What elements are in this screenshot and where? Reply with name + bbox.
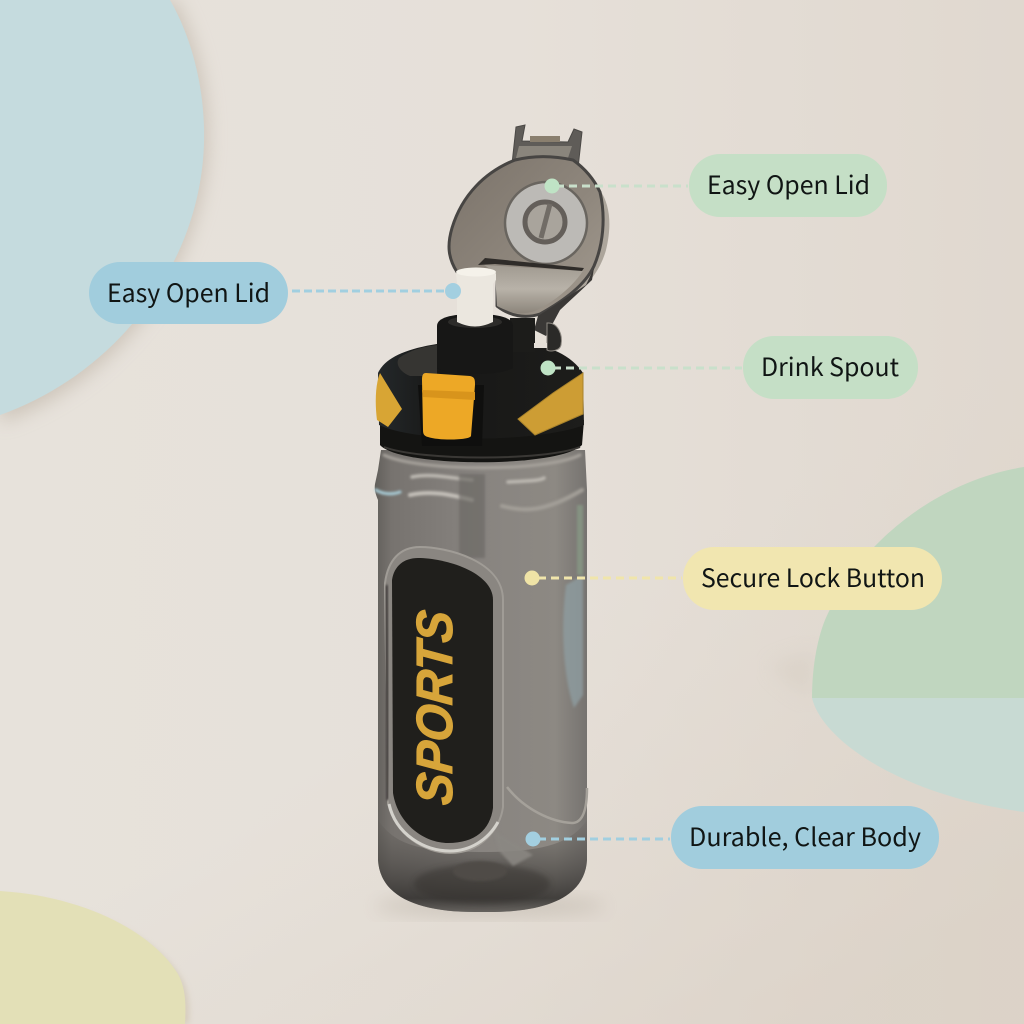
decorative circle: blue top left [0,0,208,423]
lock button ridge [422,390,475,400]
callout: easy open lid top [544,154,887,217]
dot [445,283,461,299]
pill [689,154,887,217]
lid opening bar [541,204,550,238]
button recess [418,385,484,446]
lock button [422,373,475,440]
spout back [510,318,535,352]
yellow left grip [376,373,402,427]
frame dark edge [386,585,388,800]
label frame [385,547,503,853]
label: Secure Lock Button [701,559,925,595]
side tint [563,575,583,708]
collar rim [384,447,580,458]
spout base [437,314,513,374]
dot [540,360,556,376]
pill [89,262,288,324]
callout: drink spout [540,336,918,399]
inner straw [459,474,485,558]
lid tab window [516,146,572,158]
leader [556,184,688,188]
dot [544,178,560,194]
cap top [378,344,584,439]
lid inside [449,157,603,316]
leader [538,838,670,840]
label panel [392,558,493,843]
bottle shadow [375,896,605,916]
leader [553,366,742,370]
decorative circle: yellow bottom left [0,891,189,1024]
callout: durable clear body [526,806,939,869]
dot [526,832,540,846]
pill [671,806,939,869]
upper highlights [376,455,582,509]
lid base [376,268,584,462]
spout lip [456,268,496,276]
bottle base tint [378,820,587,912]
lid tab clip [530,136,560,142]
decorative circle: green right [770,467,1024,812]
label: Durable, Clear Body [689,818,921,854]
spout opening [448,316,502,328]
flip lid [449,125,609,336]
white spout [456,270,496,326]
bottle base centre [453,861,507,881]
label: Drink Spout [761,348,900,384]
callout: easy open lid left [89,262,461,324]
hinge gap [534,343,547,348]
bottle body [375,450,587,912]
lid opening ring [525,202,565,242]
callout: secure lock button [524,547,942,610]
frame lower glint [389,804,498,851]
bottle base dimple [414,864,550,904]
label: Easy Open Lid [107,274,270,310]
lid lower panel [484,265,583,313]
lower collar [380,420,584,462]
lid tab [512,125,582,168]
lid slot [478,258,584,271]
hinge pin [547,323,561,351]
label text: SPORTS [406,608,463,807]
grip curve [507,787,587,823]
yellow right grip [518,373,583,435]
bottle [375,450,587,912]
dot [524,570,540,586]
leader [538,576,682,580]
pill [743,336,918,399]
leader [292,290,448,292]
pill [683,547,942,610]
label: Easy Open Lid [707,166,870,202]
lid hinge arm [534,268,594,336]
side green tint [577,505,583,575]
lower straw [493,830,533,866]
cap deck [398,345,437,376]
lid outer wall [520,190,609,318]
lid seal ring [505,182,587,264]
